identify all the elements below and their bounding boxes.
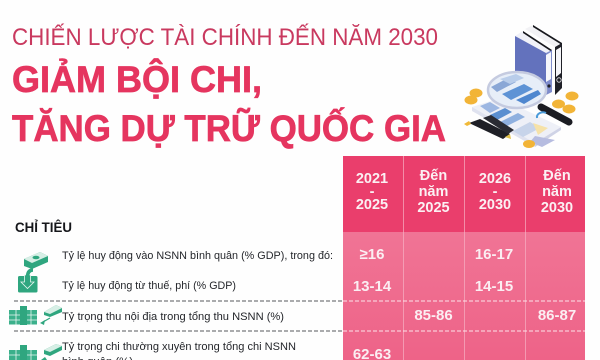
icon: customs building and money: [9, 305, 62, 325]
table values: ≥16: [360, 246, 384, 263]
table values: 13-14: [353, 278, 392, 295]
title: TĂNG DỰ TRỮ QUỐC GIA: [12, 107, 446, 149]
title: GIẢM BỘI CHI,: [12, 58, 262, 100]
table values: 85-86: [414, 307, 453, 324]
header: đến năm 2025: 2025: [417, 200, 450, 216]
row labels: Tỷ lệ huy động từ thuế, phí (% GDP): [62, 280, 236, 292]
heading: chỉ tiêu: CHỈ TIÊU: [15, 220, 72, 235]
table values: 86-87: [538, 307, 576, 324]
header: 2026-2030: 2030: [479, 197, 511, 213]
header: 2026-2030: 2026: [479, 171, 511, 187]
header: đến năm 2025: Đến: [420, 168, 447, 184]
icon: customs building and money, row four: [9, 344, 62, 360]
title: [12, 58, 446, 149]
icon: money into box: [18, 252, 48, 292]
row labels: Tỷ lệ huy động vào NSNN bình quân (% GDP), trong đó:: [62, 250, 333, 262]
icon: magnifier: [488, 72, 569, 122]
header: 2026-2030: -: [493, 184, 498, 200]
row labels: Tỷ trọng chi thường xuyên trong tổng chi NSNN: [62, 341, 296, 353]
header: đến năm 2030: Đến: [543, 168, 571, 184]
header: 2021-2025: 2025: [356, 197, 388, 213]
row labels: [62, 250, 333, 360]
header: đến năm 2030: năm: [542, 184, 572, 200]
header: đến năm 2030: 2030: [541, 200, 573, 216]
illustration: binders, magnifier, documents and coins: [464, 25, 578, 148]
subtitle: CHIẾN LƯỢC TÀI CHÍNH ĐẾN NĂM 2030: [12, 23, 438, 51]
row labels: Tỷ trọng thu nội địa trong tổng thu NSNN (%): [62, 311, 284, 323]
header: 2021-2025: 2021: [356, 171, 388, 187]
icon: coins: [464, 88, 578, 148]
panel: table header: [343, 156, 585, 232]
panel: table body: [343, 232, 585, 360]
icon: documents: [472, 98, 561, 147]
icon: marker pens: [464, 115, 514, 139]
header: đến năm 2025: năm: [419, 184, 448, 200]
icon: black binder: [525, 25, 562, 95]
icon: blue binder: [515, 31, 552, 95]
header: 2021-2025: -: [370, 184, 375, 200]
table values: [353, 246, 576, 360]
table values: 14-15: [475, 278, 513, 295]
table values: 16-17: [475, 246, 513, 263]
